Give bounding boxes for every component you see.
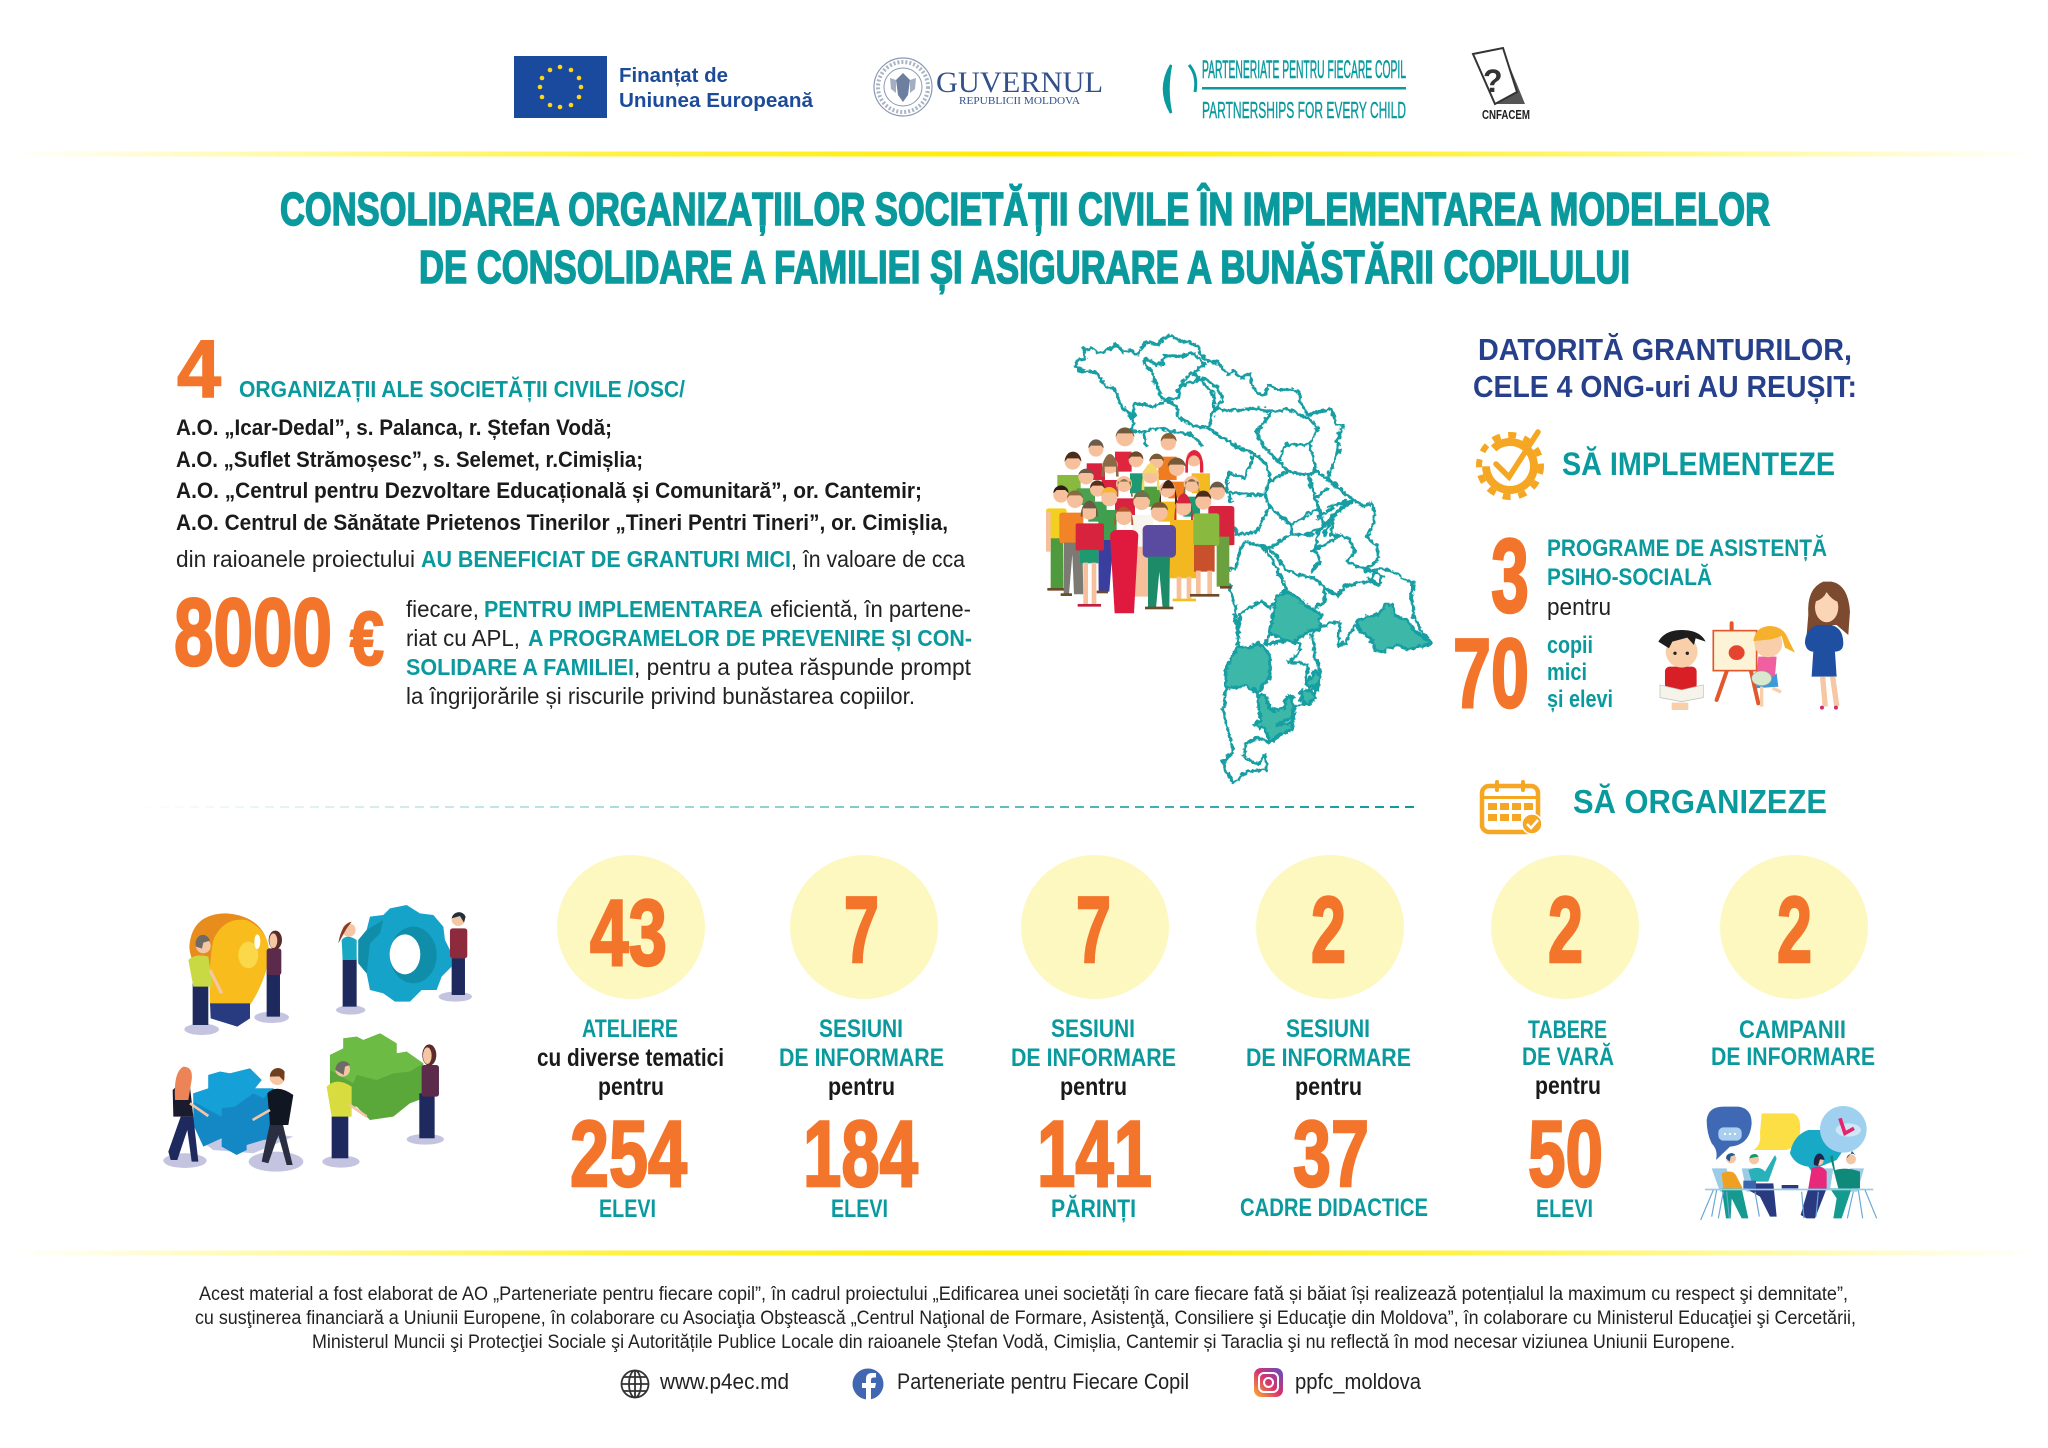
- illustration: crowd of people: [1046, 427, 1234, 613]
- stat circle: 43 workshops: 43: [590, 880, 667, 985]
- back row: [1115, 452, 1132, 472]
- boy reading: [1658, 630, 1706, 710]
- stat circle: 2 sessions for 37 teachers: 37: [1293, 1101, 1369, 1206]
- stat circle: 7 sessions for 184 pupils: SESIUNI: [819, 1015, 903, 1043]
- footer disclaimer: [195, 1284, 1856, 1353]
- grant purpose paragraph: la îngrijorările și riscurile privind bunăstarea copiilor.: [406, 683, 915, 709]
- grant purpose paragraph: riat cu APL,: [406, 625, 520, 651]
- logo: Parteneriate pentru Fiecare Copil: PARTNERSHIPS FOR EVERY CHILD: [1202, 97, 1406, 123]
- stat: 70 children: copii: [1547, 632, 1593, 659]
- instagram link: [1254, 1368, 1422, 1397]
- stat circle: 43 workshops: 254: [570, 1101, 687, 1206]
- illustration: team discussion: [1701, 1106, 1877, 1220]
- stat circle: 7 sessions for 141 parents: [1011, 855, 1176, 1223]
- grant purpose paragraph: fiecare,: [406, 596, 479, 622]
- blue puzzle team: [163, 1067, 303, 1172]
- stat circle: 2 sessions for 37 teachers: DE INFORMARE: [1246, 1044, 1411, 1072]
- icon: gear with check: [1477, 432, 1543, 499]
- highlighted raion: Cimișlia: [1268, 590, 1320, 642]
- organisations list: [176, 415, 948, 535]
- stat: 3 programs: [1491, 518, 1827, 635]
- stat circle: 7 sessions for 141 parents: PĂRINȚI: [1051, 1194, 1136, 1223]
- logo: EU funding: Uniunea Europeană: [619, 90, 814, 112]
- stat circle: 2 summer camps for 50 pupils: 50: [1528, 1101, 1603, 1206]
- icon: calendar: [1482, 780, 1542, 834]
- stat: 70 children: mici: [1547, 659, 1587, 686]
- map of Moldova: [1073, 334, 1430, 782]
- grant text line: [176, 546, 965, 572]
- heading: organisations: ORGANIZAȚII ALE SOCIETĂȚII CIVILE /OSC/: [239, 375, 686, 402]
- stat circle: 43 workshops: ELEVI: [599, 1195, 656, 1223]
- website link: www.p4ec.md: [659, 1369, 789, 1394]
- girl painting: [1752, 626, 1795, 707]
- logo: CNFACEM: ?: [1483, 63, 1503, 99]
- organisations list: A.O. „Suflet Strămoșesc”, s. Selemet, r.Cimișlia;: [176, 447, 643, 472]
- logo: Guvernul Republicii Moldova: REPUBLICII MOLDOVA: [959, 95, 1080, 107]
- heading: thanks to grants: CELE 4 ONG-uri AU REUȘIT:: [1473, 369, 1857, 404]
- heading: thanks to grants: DATORITĂ GRANTURILOR,: [1478, 332, 1852, 367]
- gear team: [336, 905, 472, 1015]
- stat circle: 2 summer camps for 50 pupils: [1491, 855, 1639, 1223]
- stat circle: 7 sessions for 141 parents: 141: [1037, 1101, 1152, 1206]
- highlighted raion: Cantemir: [1223, 642, 1268, 692]
- logo: Guvernul Republicii Moldova: [874, 58, 1103, 116]
- stat circle: 2 summer camps for 50 pupils: 2: [1548, 877, 1583, 982]
- heading: thanks to grants: [1473, 332, 1857, 404]
- footer disclaimer: cu susţinerea financiară a Uniunii Europene, în colaborare cu Asociaţia Obştească „Centrul Naţional de Formare, Asistenţă, Consiliere şi Educaţie din Moldova”, în colaborare cu Ministerul Educaţiei şi Cercetării,: [195, 1308, 1856, 1329]
- stat circle: 7 sessions for 184 pupils: 184: [803, 1101, 918, 1206]
- logo: EU funding: Finanțat de: [619, 65, 728, 87]
- grant purpose paragraph: [406, 596, 972, 709]
- instagram link: ppfc_moldova: [1295, 1369, 1422, 1394]
- organisations list: A.O. Centrul de Sănătate Prietenos Tinerilor „Tineri Pentri Tineri”, or. Cimișlia,: [176, 510, 948, 535]
- easel: [1713, 623, 1758, 703]
- panel: organisations: [174, 324, 972, 709]
- stat circle: 7 sessions for 184 pupils: 7: [844, 877, 879, 982]
- green puzzle team: [322, 1033, 444, 1168]
- stat circle: 7 sessions for 184 pupils: pentru: [828, 1073, 895, 1101]
- amount: 8000 euro: €: [350, 597, 384, 682]
- website link: [622, 1369, 789, 1398]
- grant purpose paragraph: PENTRU IMPLEMENTAREA: [484, 596, 763, 622]
- stat circle: 2 information campaigns: [1711, 855, 1875, 1071]
- highlighted raion: Ștefan Vodă: [1355, 603, 1430, 650]
- logo: Parteneriate pentru Fiecare Copil: [1164, 56, 1406, 123]
- heading: to organize: SĂ ORGANIZEZE: [1573, 783, 1827, 820]
- stat circle: 7 sessions for 184 pupils: DE INFORMARE: [779, 1044, 944, 1072]
- illustration: teamwork: [163, 905, 472, 1172]
- stat circle: 2 sessions for 37 teachers: CADRE DIDACTICE: [1240, 1194, 1428, 1222]
- title: DE CONSOLIDARE A FAMILIEI ȘI ASIGURARE A BUNĂSTĂRII COPILULUI: [419, 241, 1630, 294]
- stat circle: 2 sessions for 37 teachers: [1240, 855, 1428, 1222]
- number 4: 4: [177, 324, 221, 415]
- stat circle: 2 summer camps for 50 pupils: TABERE: [1528, 1016, 1607, 1044]
- organisations list: A.O. „Centrul pentru Dezvoltare Educațională și Comunitară”, or. Cantemir;: [176, 478, 922, 503]
- stat circle: 7 sessions for 141 parents: 7: [1076, 877, 1111, 982]
- facebook link: [852, 1368, 1189, 1400]
- facebook link: Parteneriate pentru Fiecare Copil: [897, 1369, 1189, 1394]
- logo: CNFACEM: [1473, 48, 1530, 122]
- stat circle: 2 information campaigns: DE INFORMARE: [1711, 1043, 1875, 1071]
- stat: 70 children: și elevi: [1547, 686, 1613, 713]
- grant text line: AU BENEFICIAT DE GRANTURI MICI: [421, 546, 791, 572]
- stat: 70 children: 70: [1453, 618, 1529, 728]
- stat circle: 7 sessions for 141 parents: SESIUNI: [1051, 1015, 1135, 1043]
- stat circle: 7 sessions for 141 parents: DE INFORMARE: [1011, 1044, 1176, 1072]
- stat circle: 43 workshops: [537, 855, 724, 1223]
- logo: CNFACEM: CNFACEM: [1482, 107, 1530, 122]
- grant purpose paragraph: SOLIDARE A FAMILIEI: [406, 654, 634, 680]
- grant purpose paragraph: A PROGRAMELOR DE PREVENIRE ȘI CON-: [528, 625, 972, 652]
- stat circle: 7 sessions for 184 pupils: [779, 855, 944, 1223]
- stat: 3 programs: PSIHO-SOCIALĂ: [1547, 563, 1712, 591]
- stat circle: 2 sessions for 37 teachers: 2: [1311, 877, 1346, 982]
- stat circle: 2 information campaigns: 2: [1777, 877, 1812, 982]
- organisations list: A.O. „Icar-Dedal”, s. Palanca, r. Ștefan Vodă;: [176, 415, 612, 440]
- title: [280, 183, 1770, 294]
- logo: EU funding: [514, 56, 814, 118]
- stat circle: 2 sessions for 37 teachers: pentru: [1295, 1073, 1362, 1101]
- front row: [1046, 508, 1067, 539]
- stat: 3 programs: PROGRAME DE ASISTENȚĂ: [1547, 534, 1827, 562]
- stat circle: 2 sessions for 37 teachers: SESIUNI: [1286, 1015, 1370, 1043]
- amount: 8000 euro: 8000: [174, 579, 332, 686]
- stat circle: 43 workshops: cu diverse tematici: [537, 1044, 724, 1072]
- stat circle: 2 summer camps for 50 pupils: DE VARĂ: [1522, 1042, 1614, 1071]
- highlighted raion: Taraclia: [1252, 670, 1320, 742]
- text: PARTENERIATE PENTRU FIECARE COPIL: [1202, 56, 1406, 84]
- stat: 3 programs: pentru: [1547, 594, 1611, 621]
- stat circle: 7 sessions for 141 parents: pentru: [1060, 1073, 1127, 1101]
- bulb team: [184, 913, 289, 1035]
- teacher: [1805, 582, 1850, 710]
- stat circle: 2 summer camps for 50 pupils: pentru: [1535, 1072, 1601, 1100]
- stat: 70 children: [1453, 618, 1613, 728]
- stat circle: 43 workshops: ATELIERE: [582, 1015, 678, 1043]
- footer disclaimer: Ministerul Muncii şi Protecţiei Sociale şi Autoritățile Publice Locale din raioanele Ștefan Vodă, Cimișlia, Cantemir și Taraclia şi nu reflectă în mod necesar viziunea Uniunii Europene.: [312, 1332, 1735, 1353]
- logo: Guvernul Republicii Moldova: GUVERNUL: [936, 66, 1103, 99]
- grant purpose paragraph: eficientă, în partene-: [770, 596, 971, 622]
- grant text line: din raioanele proiectului: [176, 546, 415, 572]
- stat circle: 2 information campaigns: CAMPANII: [1739, 1016, 1846, 1044]
- stat: 3 programs: 3: [1491, 518, 1529, 635]
- footer disclaimer: Acest material a fost elaborat de AO „Parteneriate pentru fiecare copil”, în cadrul proiectului „Edificarea unei societăți în care fiecare fată și băiat își realizează potențialul la maximum cu respect şi demnitate”,: [199, 1284, 1848, 1305]
- grant purpose paragraph: , pentru a putea răspunde prompt: [634, 654, 972, 680]
- stat circle: 2 summer camps for 50 pupils: ELEVI: [1536, 1195, 1593, 1223]
- stat circle: 43 workshops: pentru: [598, 1073, 664, 1101]
- heading: to implement: SĂ IMPLEMENTEZE: [1562, 446, 1835, 482]
- illustration: children and teacher: [1658, 582, 1850, 710]
- grant text line: , în valoare de cca: [791, 546, 965, 572]
- stat circle: 7 sessions for 184 pupils: ELEVI: [831, 1195, 888, 1223]
